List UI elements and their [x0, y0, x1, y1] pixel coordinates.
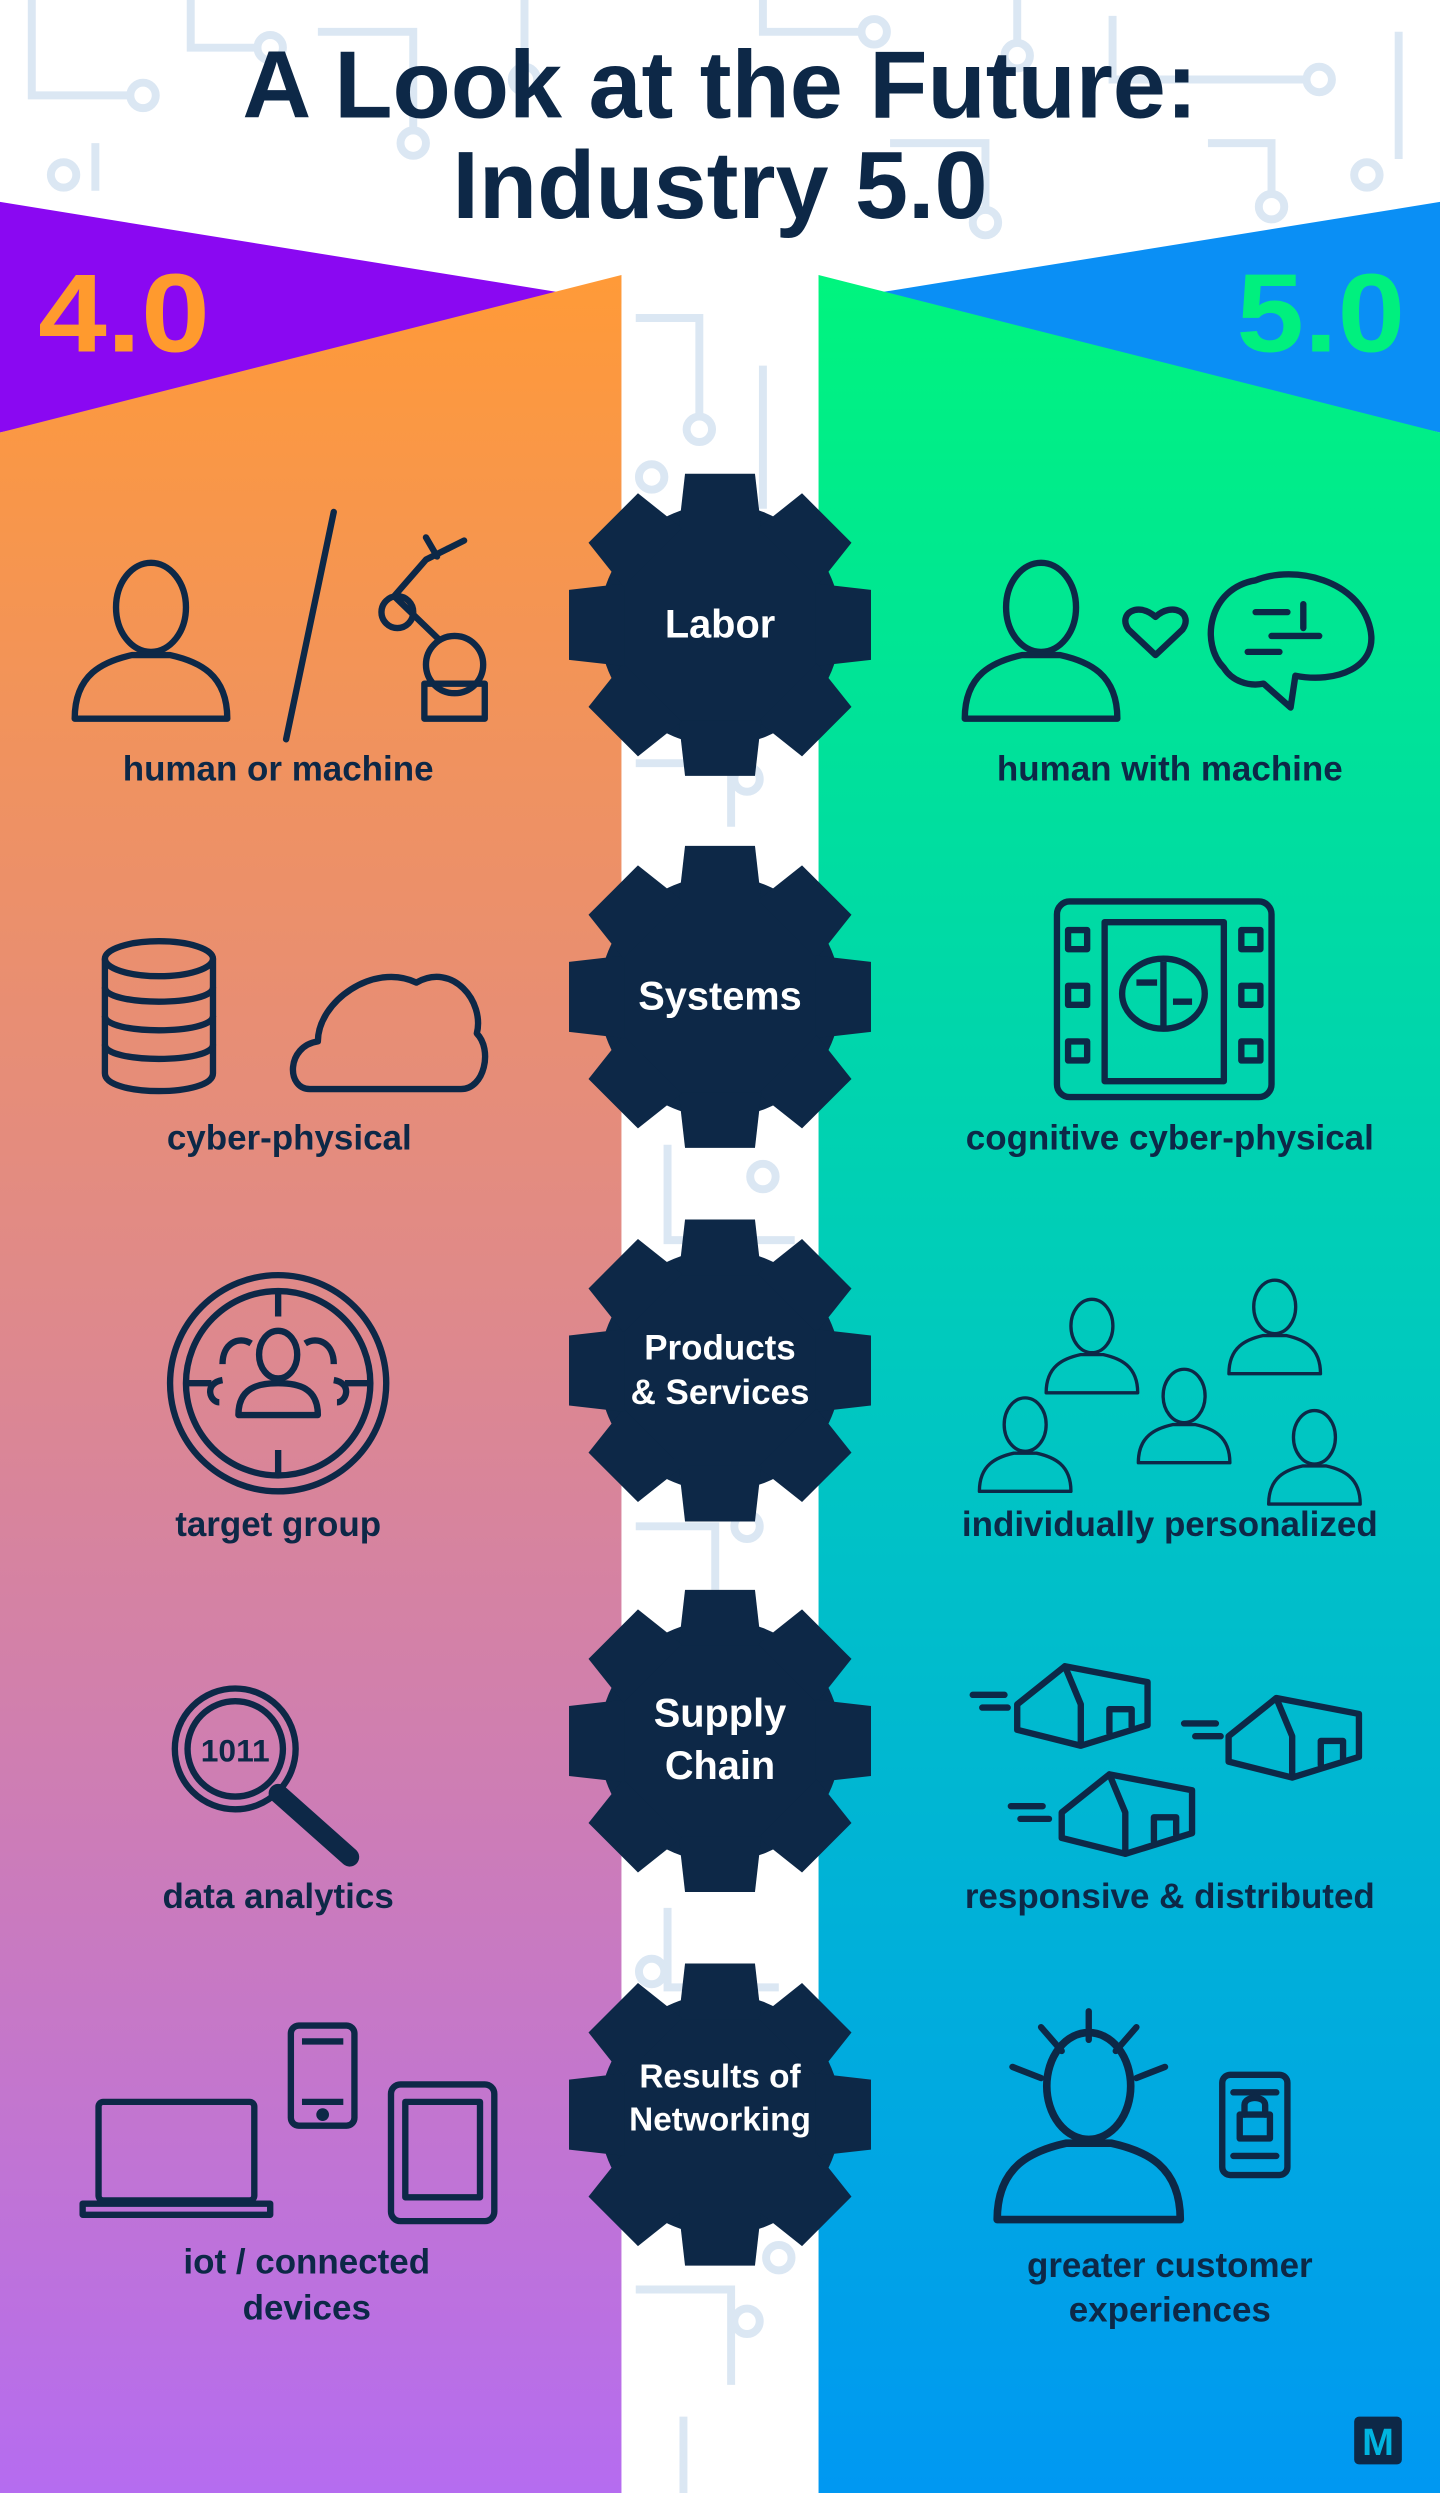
icon: greater customer experiences [997, 2011, 1287, 2220]
gear: Supply Chain: Chain [665, 1744, 775, 1788]
text: cyber-physical: cyber-physical [167, 1119, 412, 1158]
icon: human or machine [75, 512, 485, 739]
icon: cognitive cyber-physical [1057, 901, 1272, 1097]
gear: Labor [569, 474, 871, 776]
text: data analytics: data analytics [163, 1877, 394, 1916]
gear: Products & Services: Products [644, 1328, 796, 1367]
title [242, 33, 1198, 239]
icon: target group [170, 1275, 386, 1491]
gear: Systems [569, 846, 871, 1148]
title: Industry 5.0 [452, 133, 988, 239]
text: iot / connected devices [183, 2243, 430, 2328]
text: greater customer experiences: experiences [1069, 2290, 1271, 2329]
icon: iot devices [83, 2026, 494, 2221]
text: human with machine: human with machine [997, 750, 1343, 789]
text: individually personalized: individually personalized [962, 1505, 1378, 1544]
text: cognitive cyber-physical: cognitive cyber-physical [966, 1119, 1374, 1158]
icon: data analytics [175, 1688, 350, 1857]
text: greater customer experiences [1027, 2246, 1313, 2329]
label 5.0: 5.0 [1237, 250, 1405, 375]
text: greater customer experiences: greater customer [1027, 2246, 1313, 2285]
left triangle 4.0 [0, 202, 620, 432]
panel: left 4.0 [0, 275, 621, 2493]
logo [1354, 2417, 1402, 2464]
right triangle 5.0 [820, 202, 1440, 432]
gear: Results of Networking: Results of [639, 2059, 802, 2096]
icon: individually personalized [979, 1280, 1360, 1504]
text: human or machine: human or machine [123, 750, 434, 789]
gear: Products & Services [569, 1219, 871, 1522]
panel: right 5.0 [819, 275, 1440, 2493]
title: A Look at the Future: [242, 33, 1198, 139]
icon: cyber-physical [105, 941, 485, 1091]
logo: M [1362, 2421, 1394, 2464]
gear: Supply Chain [569, 1590, 871, 1892]
gear: Systems: Systems [638, 975, 802, 1019]
text: iot / connected devices: devices [243, 2289, 371, 2328]
gear: Labor: Labor [665, 603, 775, 647]
gear: Products & Services: & Services [631, 1373, 809, 1412]
icon: human with machine [965, 563, 1371, 719]
gear: Results of Networking: Networking [629, 2101, 811, 2138]
icon: data analytics: 1011 [201, 1733, 270, 1769]
icon: responsive & distributed [973, 1666, 1359, 1854]
text: iot / connected devices: iot / connected [183, 2243, 430, 2282]
label 4.0: 4.0 [38, 250, 210, 375]
text: target group: target group [175, 1505, 381, 1544]
text: responsive & distributed: responsive & distributed [965, 1877, 1375, 1916]
gear: Results of Networking [569, 1964, 871, 2266]
gear: Supply Chain: Supply [654, 1692, 786, 1736]
